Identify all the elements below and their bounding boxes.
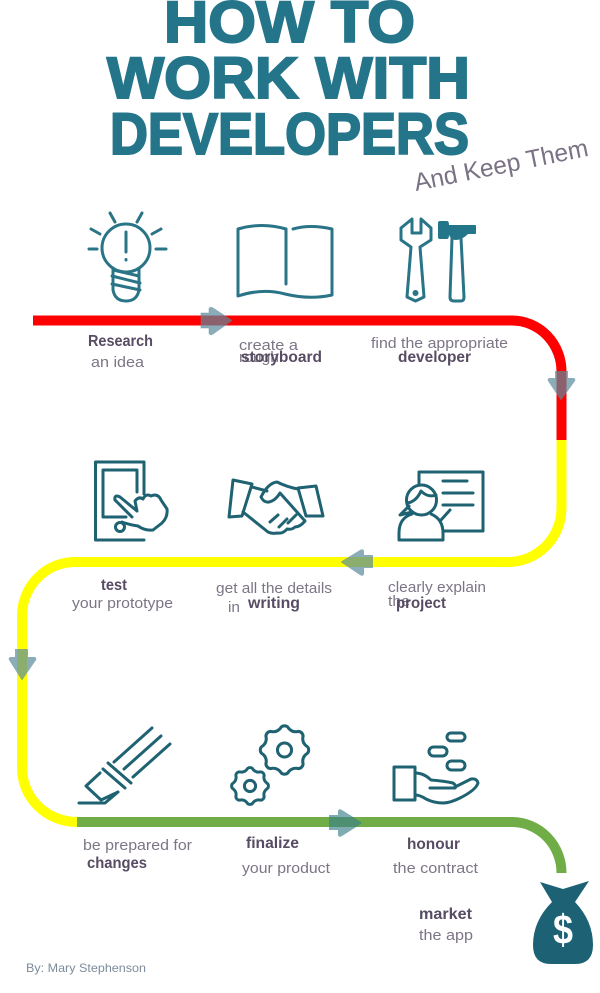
label: create storyboard: storyboard: [241, 349, 322, 366]
label: honour contract: honour: [407, 836, 460, 853]
arrow: left, second row: [341, 549, 373, 576]
label: research: an idea: [91, 354, 145, 371]
title: [107, 0, 470, 167]
label: details in writing: get all the details: [216, 580, 332, 597]
label: finalize product: [242, 835, 331, 877]
subtitle: And Keep Them: [412, 134, 591, 197]
icon: wrench and hammer: [401, 219, 476, 301]
label: test prototype: [72, 577, 173, 612]
icon: gears: [232, 726, 309, 804]
label: prepared for changes: be prepared for: [83, 837, 192, 854]
label: market app: [419, 906, 473, 944]
label: details in writing: [216, 580, 332, 616]
icon: handshake: [229, 480, 323, 533]
credit: By: Mary Stephenson: [26, 961, 146, 975]
arrow: right, third row: [329, 809, 362, 837]
icon: money bag: [533, 881, 593, 964]
label: research: [88, 333, 153, 371]
label: test prototype: test: [101, 577, 128, 594]
path: green segment: [77, 822, 562, 873]
label: create storyboard: create a: [239, 337, 299, 354]
label: explain project: project: [396, 595, 447, 612]
label: market app: the app: [419, 927, 473, 944]
label: details in writing: in: [228, 599, 240, 616]
label: find developer: developer: [398, 349, 471, 366]
arrow: down, left side: [9, 649, 36, 680]
label: test prototype: your prototype: [72, 595, 173, 612]
title: DEVELOPERS: [110, 102, 469, 167]
label: prepared for changes: changes: [87, 855, 147, 872]
arrow: right, first row: [201, 307, 232, 335]
label: find developer: find the appropriate: [371, 335, 508, 352]
label: market app: market: [419, 906, 473, 923]
label: research: Research: [88, 333, 153, 350]
label: find developer: [371, 335, 508, 366]
label: details in writing: writing: [247, 595, 300, 612]
icon: finger on tablet: [96, 462, 167, 540]
arrow: down, right side: [548, 371, 575, 400]
icon: open book: [238, 226, 332, 297]
icon: light bulb: [89, 213, 166, 301]
label: honour contract: [393, 836, 479, 877]
icon: person presenting board: [399, 472, 483, 540]
label: explain project: [388, 579, 486, 612]
label: create storyboard: rough: [239, 349, 279, 366]
icon: hand with coins: [394, 733, 478, 803]
title: WORK WITH: [107, 46, 470, 111]
label: honour contract: the contract: [393, 860, 479, 877]
path: yellow segment: [22, 440, 562, 822]
label: finalize product: finalize: [246, 835, 299, 852]
icon: highlighter pen: [79, 728, 170, 803]
label: explain project: the: [388, 593, 410, 610]
label: explain project: clearly explain: [388, 579, 486, 596]
label: prepared for changes: [83, 837, 192, 872]
label: finalize product: your product: [242, 860, 331, 877]
path: red segment: [33, 320, 562, 440]
icon: money bag: $: [553, 906, 573, 953]
label: create storyboard: [239, 337, 322, 366]
